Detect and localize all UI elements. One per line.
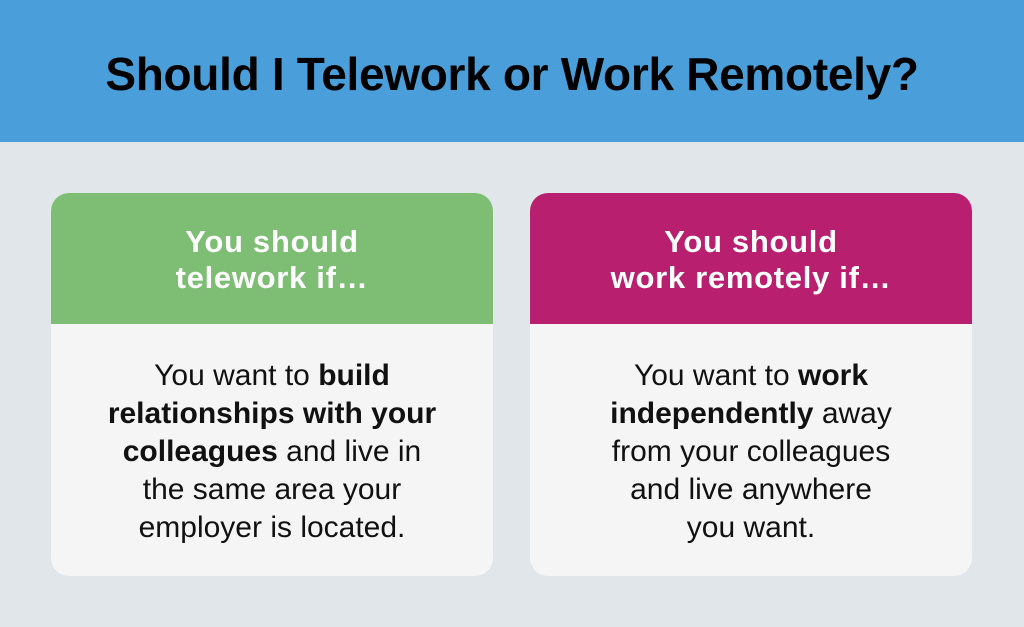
text block: telework: colleagues and live in	[123, 435, 421, 468]
text block: telework: You want to build	[154, 359, 390, 392]
panel heading: remote	[530, 193, 972, 324]
panel: remote	[530, 193, 972, 576]
panel heading: remote: work remotely if…	[611, 260, 891, 295]
panel heading: telework: You should	[185, 224, 359, 259]
panel heading: telework	[51, 193, 493, 324]
text block: telework: employer is located.	[139, 511, 405, 544]
text block: remote	[610, 359, 892, 544]
text block: telework	[108, 359, 436, 544]
title: Should I Telework or Work Remotely?	[105, 48, 919, 100]
text block: remote: You want to work	[634, 359, 868, 392]
panel heading: remote: You should	[664, 224, 838, 259]
text block: remote: from your colleagues	[612, 435, 890, 468]
header band	[0, 0, 1024, 142]
text block: remote: independently away	[610, 397, 892, 430]
text block: telework: the same area your	[143, 473, 401, 506]
text block: remote: you want.	[687, 511, 815, 544]
text block: remote: and live anywhere	[630, 473, 872, 506]
panel: telework	[51, 193, 493, 576]
text block: telework: relationships with your	[108, 397, 436, 430]
panel heading: telework: telework if…	[176, 260, 368, 295]
